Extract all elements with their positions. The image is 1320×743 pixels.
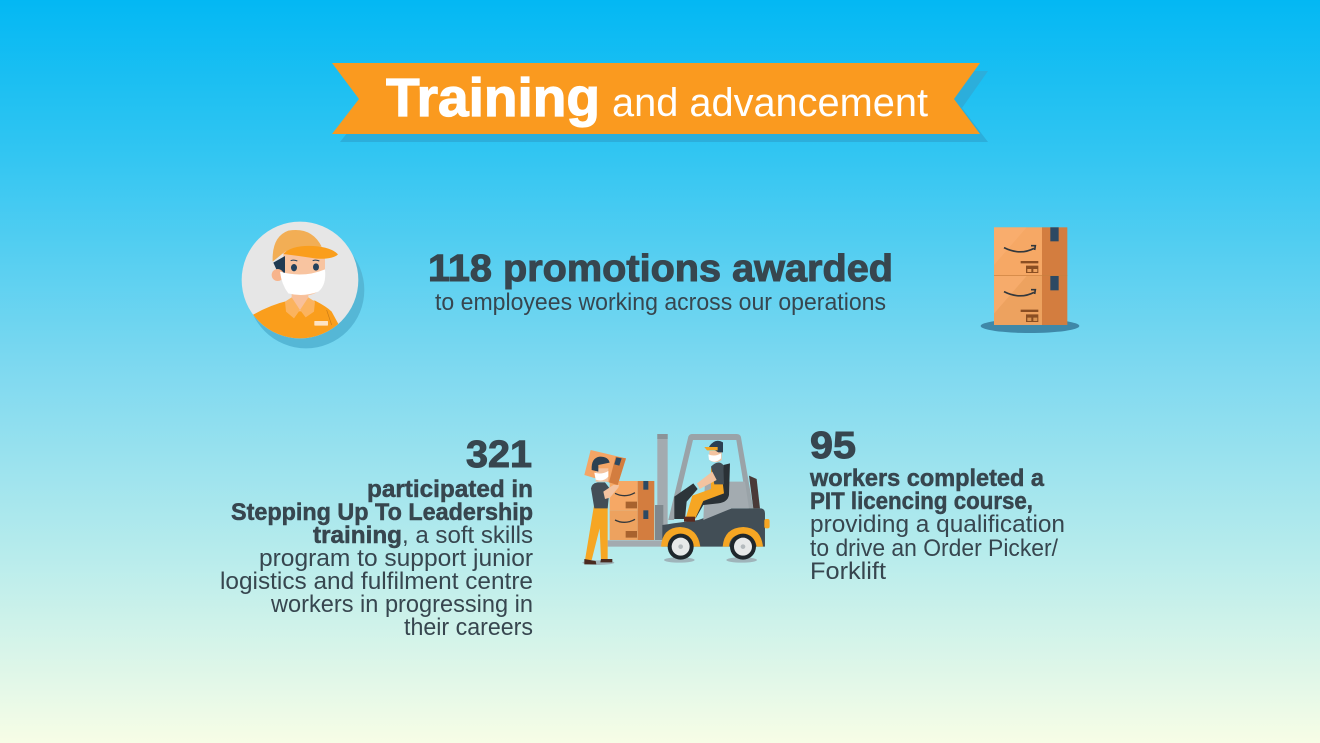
stat: 321 leadership training	[220, 434, 533, 641]
stat: 95 PIT licencing: 95	[810, 425, 856, 467]
headline: promotions: 118 promotions awarded	[428, 248, 893, 290]
stat description: training	[313, 522, 402, 549]
sub-heading: to employees working across our operations	[435, 289, 886, 316]
lifted parcel	[584, 450, 626, 485]
stat description: providing a qualification	[810, 511, 1065, 538]
wheels	[668, 534, 756, 560]
cab frame	[668, 434, 753, 520]
stat: 321 leadership training: 321	[466, 434, 532, 476]
title text: Training	[386, 68, 600, 128]
stat description: , a soft skills	[402, 522, 533, 549]
stat description: workers in progressing in	[270, 591, 533, 618]
steering	[674, 483, 698, 519]
mast	[657, 434, 668, 538]
stat description: participated in	[367, 476, 533, 503]
driver	[684, 441, 724, 522]
headline: promotions	[428, 248, 893, 316]
seat	[690, 463, 730, 518]
stat: 95 PIT licencing	[809, 425, 1065, 585]
title text	[386, 68, 928, 128]
stat description: Forklift	[810, 558, 886, 585]
stat description: workers completed a	[809, 465, 1045, 492]
illustration: forklift with workers	[582, 434, 770, 565]
forks	[608, 540, 663, 547]
icon: masked worker avatar	[242, 222, 364, 348]
handler worker	[584, 457, 619, 564]
stat description: logistics and fulfilment centre	[220, 568, 533, 595]
stat description	[809, 465, 1065, 585]
stat description	[220, 476, 533, 641]
stat description: PIT licencing course,	[810, 488, 1033, 515]
stat description: to drive an Order Picker/	[810, 535, 1058, 562]
title banner	[332, 63, 988, 142]
icon: stacked parcels	[981, 227, 1079, 333]
stat description: their careers	[404, 614, 533, 641]
title text: and advancement	[612, 81, 928, 125]
forklift body	[662, 508, 765, 547]
wheel shadows	[582, 557, 757, 565]
stat description: Stepping Up To Leadership	[231, 499, 533, 526]
stat description: program to support junior	[259, 545, 533, 572]
parcels on forks	[610, 481, 654, 540]
